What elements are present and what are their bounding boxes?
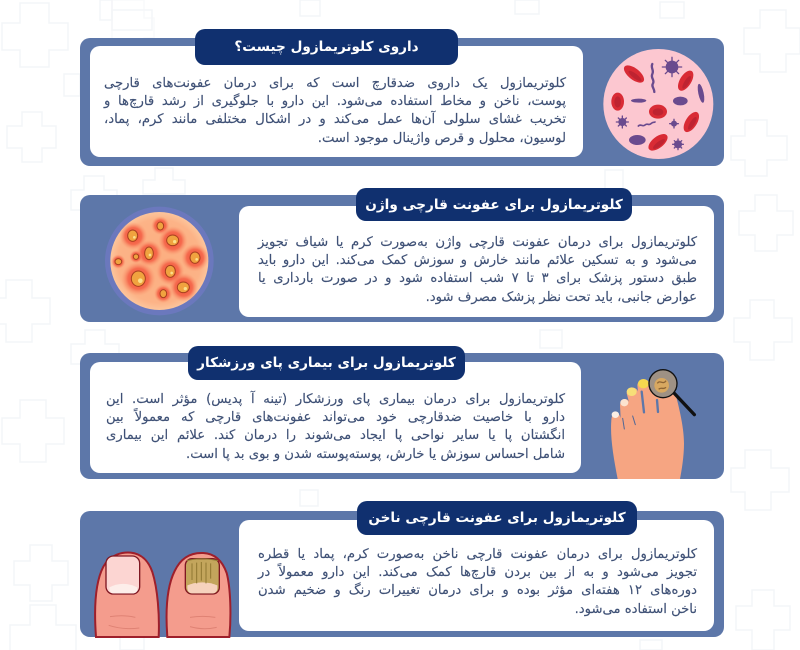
text block: panel 3: دارو با خاصیت ضدقارچی خود می‌تواند عفونت‌های قارچی که معمولاً بین [106, 410, 565, 425]
heading: athlete's foot: کلوتریمازول برای بیماری پای ورزشکار [197, 355, 456, 371]
text block: panel 2: می‌شود و به تسکین علائم مانند خارش و سوزش کمک می‌کند. این دارو باید [258, 253, 697, 268]
text block: panel 3: شامل احساس سوزش یا خارش، پوسته‌پوسته شدن و بوی بد پا است. [186, 447, 565, 462]
heading: athlete's foot [188, 346, 465, 380]
text block: panel 1: پوست، ناخن و مخاط استفاده می‌شود. این دارو با جلوگیری از رشد قارچ‌ها و [104, 94, 566, 109]
text block: panel 2: کلوتریمازول برای درمان عفونت قارچی واژن به‌صورت کرم یا شیاف تجویز [258, 235, 697, 250]
text box: panel 4 [239, 520, 714, 631]
text block: panel 1: تخریب غشای سلولی آن‌ها عمل می‌کند و در اشکال مختلفی مانند کرم، پماد، [104, 112, 566, 127]
icon: skin lesions [105, 206, 214, 316]
text block: panel 1: لوسیون، محلول و قرص واژینال موجود است. [318, 131, 566, 146]
text box: panel 2 [239, 206, 714, 317]
panel: vaginal fungal infection [80, 195, 724, 322]
icon: healthy and infected toenails [94, 552, 232, 638]
heading: nail infection [357, 501, 637, 535]
icon: foot with magnifier [611, 369, 696, 479]
heading: vaginal infection: کلوتریمازول برای عفونت قارچی واژن [365, 196, 623, 212]
text block: panel 4: کلوتریمازول برای درمان عفونت قارچی ناخن به‌صورت کرم، پماد یا قطره [258, 547, 697, 562]
text block: panel 2: عوارض جانبی، باید تحت نظر پزشک مصرف شود. [426, 290, 697, 305]
text block: panel 2: طبق دستور پزشک برای ۳ تا ۷ شب استفاده شود و در صورت بارداری یا [258, 271, 697, 286]
text block: panel 4: ناخن استفاده می‌شود. [575, 602, 697, 617]
text block: panel 4 [257, 547, 698, 617]
panel: athlete's foot [80, 353, 724, 479]
text block: panel 4: دوره‌های ۱۲ هفته‌ای مؤثر بوده و برای درمان تغییرات رنگ و ضخیم شدن [258, 583, 697, 598]
text box: panel 1 [90, 46, 583, 157]
text block: panel 4: تجویز می‌شود و به از بین بردن قارچ‌ها کمک می‌کند. این دارو معمولاً در [258, 565, 697, 580]
text block: panel 3: انگشتان پا یا سایر نواحی پا ایجاد می‌شوند را درمان کند. علائم این بیماری [106, 428, 565, 443]
text block: panel 3 [106, 390, 566, 462]
heading: nail infection: کلوتریمازول برای عفونت قارچی ناخن [368, 510, 626, 526]
text block: panel 1: کلوتریمازول یک داروی ضدقارچ است که برای درمان عفونت‌های قارچی [104, 76, 566, 91]
text block: panel 2 [257, 235, 698, 305]
text block: panel 3: کلوتریمازول برای درمان بیماری پای ورزشکار (تینه آ پدیس) مؤثر است. این [106, 392, 565, 407]
panel: what is clotrimazole [80, 38, 724, 166]
heading: what is clotrimazole [195, 29, 458, 65]
heading: vaginal infection [356, 188, 632, 221]
icon: microbes under microscope [603, 49, 714, 159]
text box: panel 3 [90, 362, 581, 473]
text block: panel 1 [103, 76, 566, 146]
heading: what is clotrimazole: داروی کلوتریمازول چیست؟ [234, 39, 419, 55]
panel: nail fungal infection [80, 511, 724, 637]
